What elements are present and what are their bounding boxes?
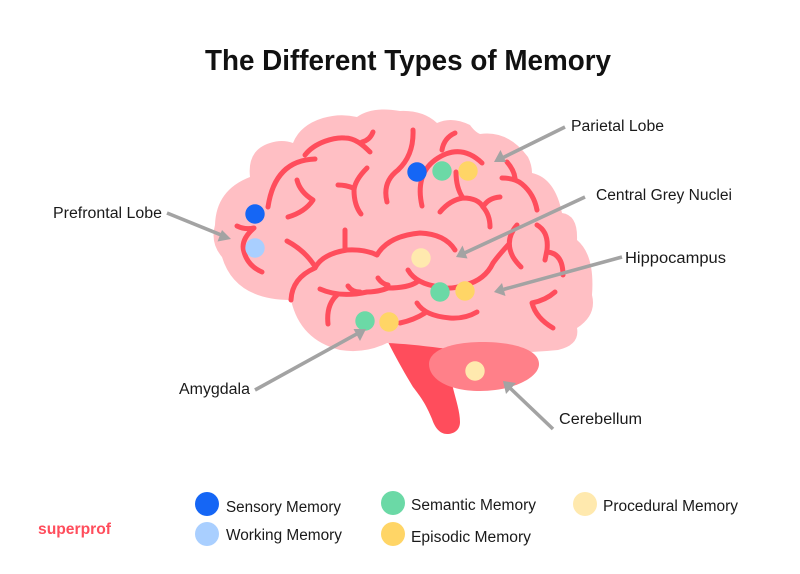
dot: episodic hippocampus bbox=[455, 281, 475, 301]
legend: Episodic Memory bbox=[381, 522, 531, 546]
dot: episodic amygdala bbox=[379, 312, 399, 332]
legend: Episodic Memory: Episodic Memory bbox=[411, 529, 531, 546]
cerebrum outline bbox=[214, 109, 593, 353]
dot: procedural cerebellum bbox=[465, 361, 485, 381]
legend: Sensory Memory: Sensory Memory bbox=[226, 499, 341, 516]
arrow bbox=[456, 197, 585, 258]
arrow bbox=[167, 213, 231, 242]
dot: semantic amygdala bbox=[355, 311, 375, 331]
legend: Semantic Memory bbox=[381, 491, 536, 515]
arrow bbox=[494, 127, 565, 162]
dot: semantic parietal bbox=[432, 161, 452, 181]
callout: Prefrontal Lobe bbox=[53, 205, 231, 242]
callout: Amygdala bbox=[179, 329, 366, 398]
brain stem bbox=[388, 342, 460, 434]
legend: Semantic Memory: Semantic Memory bbox=[411, 497, 536, 514]
logo: superprof: superprof bbox=[38, 521, 112, 538]
label: Parietal Lobe bbox=[571, 118, 664, 135]
dot: procedural central grey nuclei bbox=[411, 248, 431, 268]
legend: Working Memory: Working Memory bbox=[226, 527, 342, 544]
cerebellum bbox=[429, 342, 539, 391]
label: Cerebellum bbox=[559, 411, 642, 428]
label: Hippocampus bbox=[625, 250, 726, 267]
arrow bbox=[255, 329, 366, 390]
label: Prefrontal Lobe bbox=[53, 205, 162, 222]
memory dots bbox=[245, 161, 485, 381]
dot: episodic parietal bbox=[458, 161, 478, 181]
title: The Different Types of Memory bbox=[205, 45, 611, 77]
dot: working prefrontal bbox=[245, 238, 265, 258]
legend: Working Memory bbox=[195, 522, 342, 546]
dot: semantic hippocampus bbox=[430, 282, 450, 302]
callout: Parietal Lobe bbox=[494, 118, 664, 162]
dot: sensory prefrontal bbox=[245, 204, 265, 224]
callout: Central Grey Nuclei bbox=[456, 187, 732, 258]
legend: Procedural Memory: Procedural Memory bbox=[603, 498, 738, 515]
legend bbox=[195, 491, 738, 546]
label: Amygdala bbox=[179, 381, 250, 398]
arrow bbox=[503, 381, 553, 429]
label: Central Grey Nuclei bbox=[596, 187, 732, 204]
brain illustration bbox=[214, 109, 593, 434]
arrow bbox=[494, 257, 622, 296]
callout: Cerebellum bbox=[503, 381, 642, 429]
brain folds bbox=[237, 130, 563, 328]
legend: Procedural Memory bbox=[573, 492, 738, 516]
dot: sensory parietal bbox=[407, 162, 427, 182]
legend: Sensory Memory bbox=[195, 492, 341, 516]
callout: Hippocampus bbox=[494, 250, 726, 296]
